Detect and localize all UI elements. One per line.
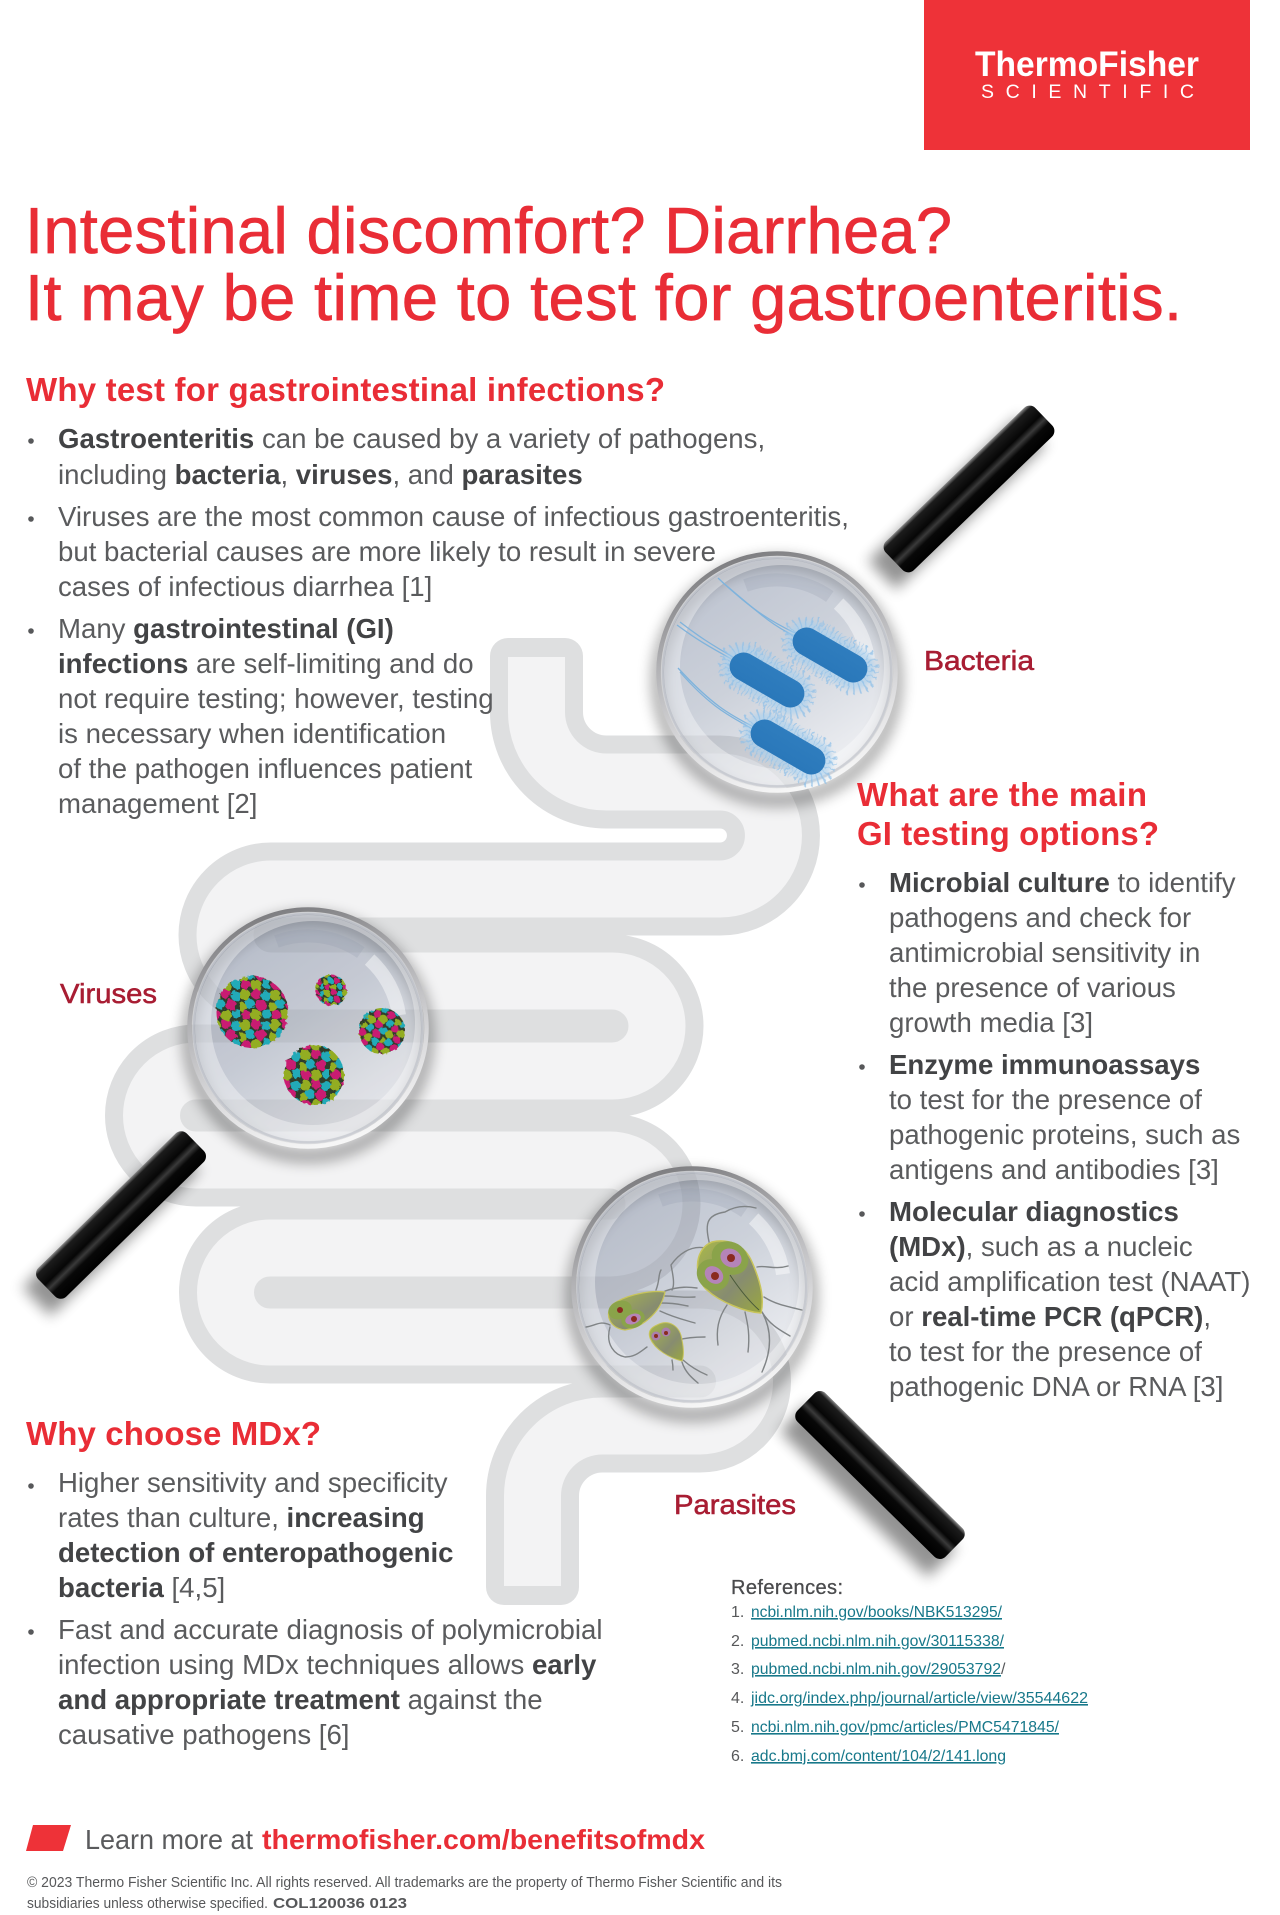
text block: why test bullets: is necessary when identification [58,718,446,749]
bacterium one [723,646,811,714]
parasite small [649,1323,684,1361]
text block: why choose MDx bullets: and appropriate treatment against the [58,1684,543,1715]
icon: bacteria magnifying glass [658,554,896,800]
text block: testing options bullets: growth media [3] [889,1007,1093,1038]
references: 1. [731,1604,744,1621]
virus large [216,976,288,1048]
footer copyright: subsidiaries unless otherwise specified. [27,1895,268,1912]
title [25,194,1182,334]
icon: bacteria magnifying glass handle [868,402,1058,590]
text block: testing options bullets: to test for the presence of [889,1336,1202,1367]
text block: why test bullets: of the pathogen influences patient [58,753,473,784]
references: / [1001,1661,1006,1678]
icon: viruses magnifying glass handle [23,1128,209,1316]
text block: testing options bullets: the presence of various [889,972,1176,1003]
text block: why test bullets: but bacterial causes are more likely to result in severe [58,536,716,567]
label: bacteria: Bacteria [924,645,1034,676]
references: 4. [731,1690,744,1707]
text block: testing options bullets: antigens and antibodies [3] [889,1154,1219,1185]
title: It may be time to test for gastroenteritis. [25,261,1182,334]
text block: testing options bullets: pathogens and check for [889,902,1191,933]
references: adc.bmj.com/content/104/2/141.long [751,1748,1006,1765]
text block: why choose MDx bullets: causative pathogens [6] [58,1719,349,1750]
text block: testing options bullets: pathogenic proteins, such as [889,1119,1240,1150]
heading: testing options: What are the main [857,776,1147,813]
references: pubmed.ncbi.nlm.nih.gov/30115338/ [751,1633,1005,1650]
learn more call to action: Learn more at [85,1824,253,1855]
learn more call to action [85,1824,705,1855]
logo: Thermo Fisher Scientific: SCIENTIFIC [981,81,1194,103]
parasite flagella [586,1206,802,1383]
references [731,1577,1088,1765]
references: ncbi.nlm.nih.gov/books/NBK513295/ [751,1604,1003,1621]
references: 5. [731,1719,744,1736]
text block: why test bullets: Many gastrointestinal (GI) [58,613,394,644]
references: pubmed.ncbi.nlm.nih.gov/29053792 [751,1661,1001,1678]
heading: why choose MDx: Why choose MDx? [26,1415,321,1452]
label: parasites: Parasites [674,1489,796,1520]
text block: why test bullets: infections are self-limiting and do [58,648,474,679]
footer copyright [27,1874,782,1912]
text block: why test bullets: not require testing; however, testing [58,683,494,714]
text block: why choose MDx bullets: rates than culture, increasing [58,1502,425,1533]
learn more call to action: thermofisher.com/benefitsofmdx [262,1824,705,1855]
text block: testing options bullets: or real-time PCR (qPCR), [889,1301,1211,1332]
text block: testing options bullets: antimicrobial sensitivity in [889,937,1200,968]
text block: why choose MDx bullets: Fast and accurate diagnosis of polymicrobial [58,1614,602,1645]
text block: why test bullets: cases of infectious diarrhea [1] [58,571,432,602]
references: 2. [731,1633,744,1650]
logo: Thermo Fisher Scientific: ThermoFisher [975,45,1199,84]
text block: testing options bullets: Enzyme immunoassays [889,1049,1200,1080]
text block: testing options bullets: Microbial culture to identify [889,867,1236,898]
text block: testing options bullets: pathogenic DNA or RNA [3] [889,1371,1223,1402]
text block: why choose MDx bullets: bacteria [4,5] [58,1572,225,1603]
text block: why test bullets: management [2] [58,788,257,819]
virus right [359,1008,405,1054]
heading: testing options [857,776,1159,852]
icon: red parallelogram [26,1825,71,1851]
footer copyright: COL120036 0123 [273,1895,407,1912]
heading: testing options: GI testing options? [857,815,1159,852]
virus bottom [284,1045,344,1105]
icon: viruses magnifying glass [189,910,427,1156]
intestine illustration [152,638,773,1605]
text block: why test bullets: Viruses are the most common cause of infectious gastroenteritis, [58,501,849,532]
logo: Thermo Fisher Scientific [924,0,1250,150]
title: Intestinal discomfort? Diarrhea? [25,194,952,267]
text block: why choose MDx bullets: infection using MDx techniques allows early [58,1649,597,1680]
bacterium two [786,621,874,689]
flagella [677,578,795,730]
references: 3. [731,1661,744,1678]
parasite large [690,1235,762,1313]
virus small [316,974,346,1006]
text block: testing options bullets: to test for the presence of [889,1084,1202,1115]
references: 6. [731,1748,744,1765]
text block: testing options bullets: (MDx), such as a nucleic [889,1231,1193,1262]
heading: why test: Why test for gastrointestinal infections? [26,371,665,408]
text block: why test bullets: including bacteria, viruses, and parasites [58,459,583,490]
references: ncbi.nlm.nih.gov/pmc/articles/PMC5471845/ [751,1719,1060,1736]
icon: parasites magnifying glass handle [780,1388,968,1577]
text block: why test bullets [28,423,849,819]
text block: testing options bullets [859,867,1250,1402]
text block: testing options bullets: Molecular diagnostics [889,1196,1179,1227]
parasite left [606,1292,665,1332]
references: References: [731,1577,843,1599]
bacterium three [744,713,832,781]
footer copyright: © 2023 Thermo Fisher Scientific Inc. All rights reserved. All trademarks are the property of Thermo Fisher Scientific and its [27,1874,782,1891]
references: jidc.org/index.php/journal/article/view/35544622 [750,1690,1088,1707]
label: viruses: Viruses [60,978,157,1009]
text block: why choose MDx bullets [28,1467,602,1750]
icon: parasites magnifying glass [573,1168,811,1415]
text block: testing options bullets: acid amplification test (NAAT) [889,1266,1250,1297]
text block: why choose MDx bullets: detection of enteropathogenic [58,1537,454,1568]
text block: why choose MDx bullets: Higher sensitivity and specificity [58,1467,448,1498]
text block: why test bullets: Gastroenteritis can be caused by a variety of pathogens, [58,423,765,454]
